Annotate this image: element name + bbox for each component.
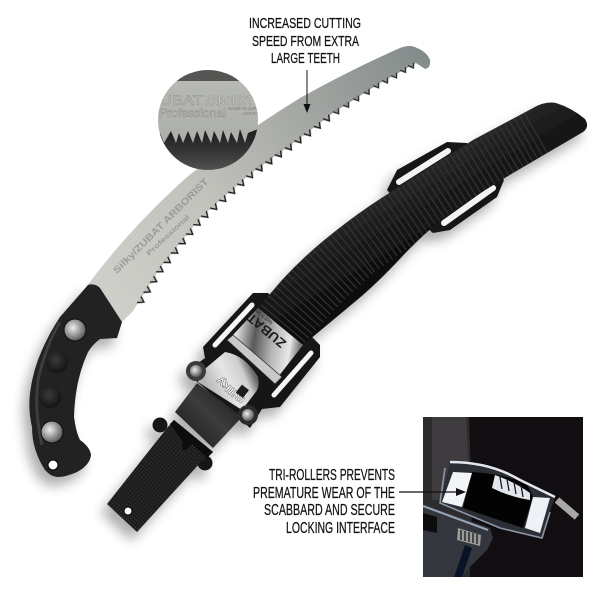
- bottom callout text: LOCKING INTERFACE: [286, 520, 395, 537]
- ribbed scabbard body: [258, 103, 587, 345]
- buckle frame with slots: [186, 293, 320, 428]
- grey background strip: [423, 417, 472, 577]
- etched text: Professional: [159, 106, 226, 120]
- saw blade with teeth: [86, 46, 430, 322]
- bottom callout text: [253, 467, 395, 537]
- magnified circle: teeth close-up: LOT.PAT: [243, 111, 261, 116]
- metal locking plate with logo: ZUBAT: [244, 310, 289, 351]
- collar below buckle: [175, 383, 242, 448]
- etched text: UBAT: [160, 92, 204, 108]
- metal locking plate with logo: MADE IN JAPAN: [252, 305, 274, 325]
- metal locking plate with logo: [227, 305, 303, 384]
- teeth: [158, 129, 258, 172]
- metal roller dome with Silky logo: Silky: [213, 374, 248, 405]
- top callout text: SPEED FROM EXTRA: [252, 33, 359, 50]
- magnified circle: teeth close-up: MADE IN JAPAN: [228, 106, 262, 111]
- top callout text: [249, 15, 361, 67]
- scabbard strap loop: [387, 142, 504, 233]
- arrow: to roller: [399, 488, 466, 496]
- bottom callout text: TRI-ROLLERS PREVENTS: [269, 467, 395, 484]
- top callout text: INCREASED CUTTING: [249, 15, 361, 32]
- bottom callout text: PREMATURE WEAR OF THE: [253, 485, 395, 502]
- metal frame, rollers and black opening: [440, 462, 577, 538]
- arrow: to teeth: [304, 70, 310, 113]
- rivets: [186, 361, 258, 425]
- saw: curved pruning saw: [86, 46, 430, 322]
- handle fasteners and grip buttons: [64, 319, 86, 341]
- metal roller dome with Silky logo: [198, 352, 259, 410]
- saw handle: [29, 284, 122, 477]
- etched text: [160, 95, 253, 118]
- blade etched text: Silky/ZUBAT ARBORIST: [111, 176, 211, 276]
- clip handle below opening: [423, 504, 493, 577]
- blade etched text: Professional: [146, 214, 191, 257]
- top callout text: LARGE TEETH: [271, 50, 340, 67]
- bottom callout text: SCABBARD AND SECURE: [264, 502, 395, 519]
- inset photo: tri-rollers: [423, 417, 583, 577]
- scabbard assembly: [107, 103, 587, 532]
- belt clip: [107, 418, 213, 532]
- magnified circle: teeth close-up: [158, 70, 262, 172]
- etched text: ARBORIST: [205, 93, 253, 108]
- dark top band: [176, 70, 240, 81]
